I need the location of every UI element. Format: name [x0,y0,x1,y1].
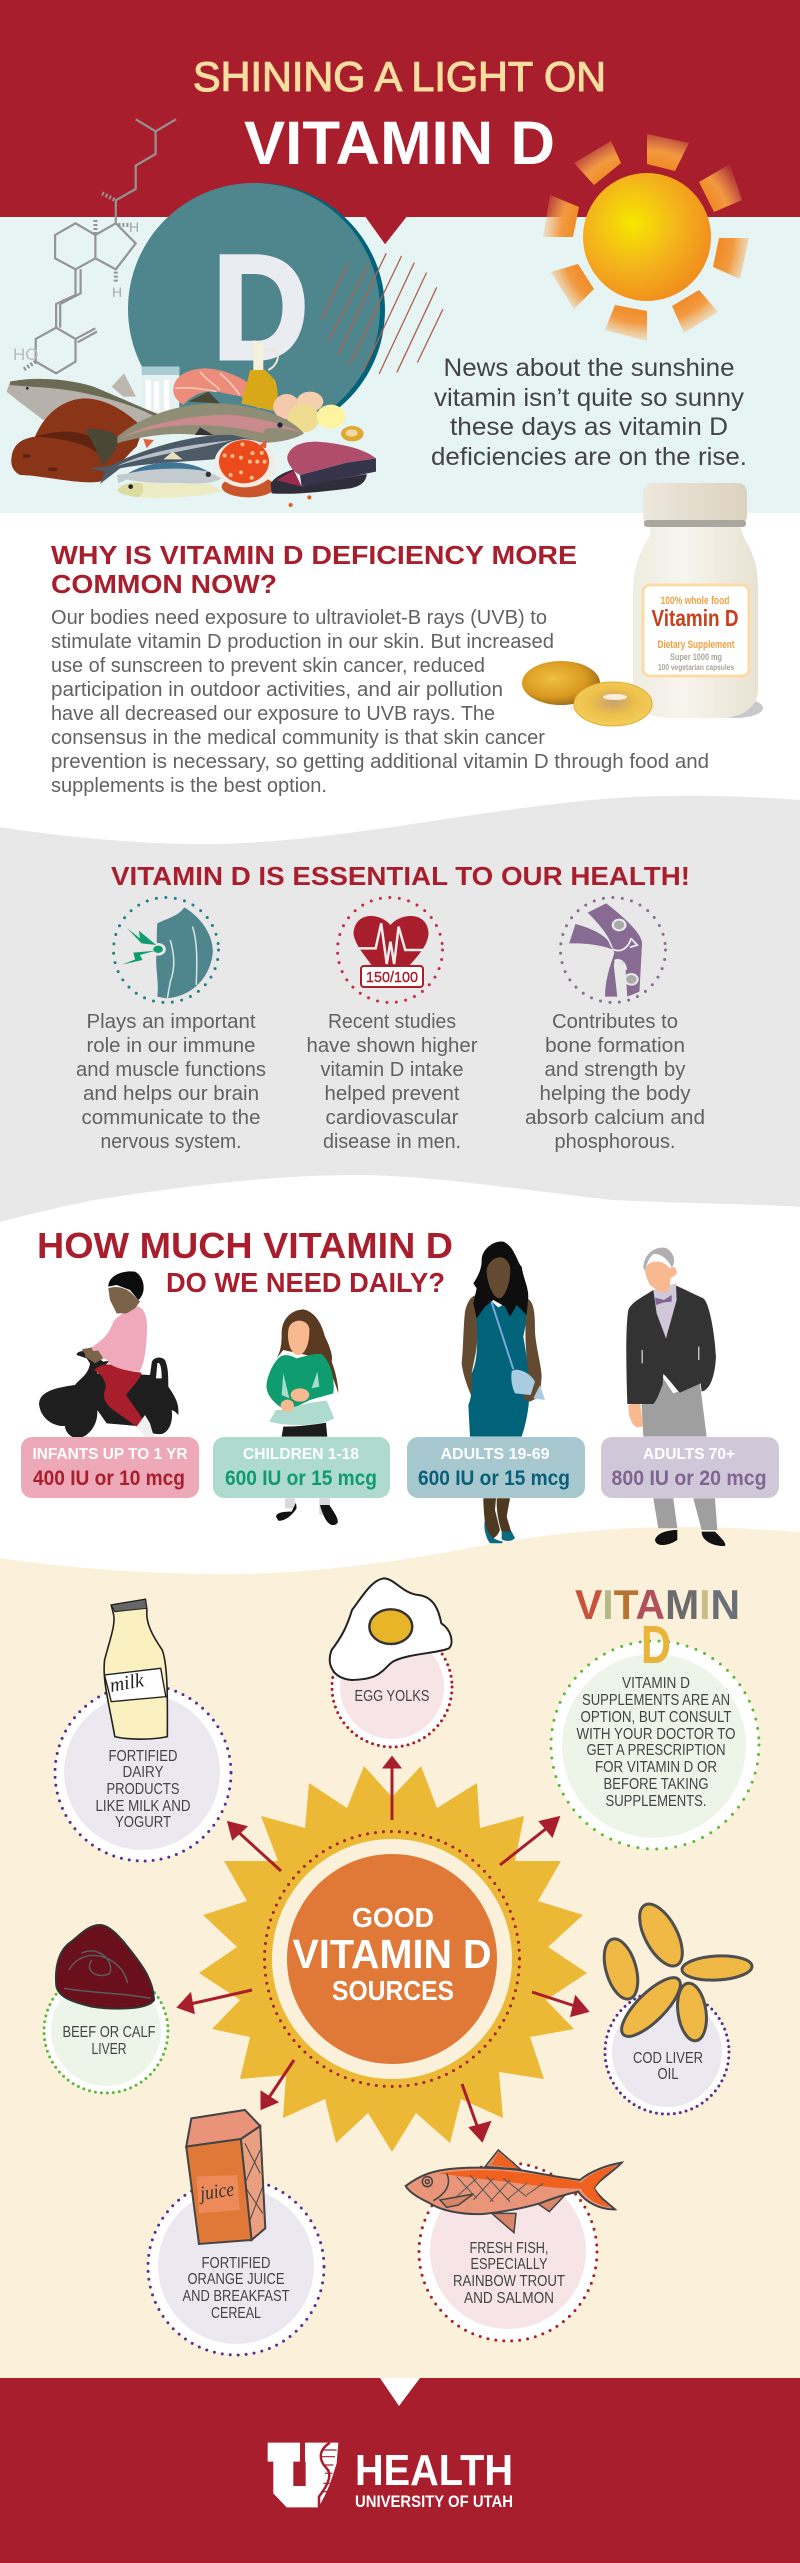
eggs [273,392,345,432]
softgel capsules [522,661,654,726]
card: adults 70+: 800 IU or 20 mcg [612,1467,766,1490]
chemical structure of vitamin D: H [112,284,122,300]
card: adults 70+: ADULTS 70+ [643,1446,735,1463]
salmon steak [173,368,267,408]
card: infants [21,1437,199,1498]
card: children [213,1437,390,1498]
rainbow trout [85,392,304,465]
capsule [341,426,364,441]
supplements text: SUPPLEMENTS. [606,1793,706,1810]
panel: essential to health [0,796,800,1222]
supplements text: SUPPLEMENTS ARE AN [582,1692,730,1709]
heading: how much [37,1225,453,1298]
icon: sun [543,134,749,341]
source: beef liver [44,1925,168,2093]
intro text [431,354,747,471]
logo: U with DNA [268,2443,338,2507]
sunburst label: GOOD [352,1902,434,1933]
icon: muscle and nerves [114,898,218,1002]
supplements text: GET A PRESCRIPTION [586,1742,726,1759]
supplements text: VITAMIN D [622,1675,690,1692]
dairy text: YOGURT [115,1814,171,1831]
supplements text: OPTION, BUT CONSULT [580,1709,732,1726]
icon: fried egg [330,1578,452,1680]
dairy text [96,1748,190,1831]
mackerel [90,427,260,484]
icon: oil capsules [598,1897,753,2044]
body paragraph: consensus in the medical community is that skin cancer [51,727,545,749]
figure: girl [266,1309,338,1525]
card: adults 19-69: ADULTS 19-69 [440,1446,550,1463]
icon: milk bottle: milk [108,1669,146,1697]
diagonal hatch lines [321,253,443,374]
sunburst label: SOURCES [332,1975,454,2006]
body paragraph: prevention is necessary, so getting additional vitamin D through food and [51,751,709,773]
text: bone formation: phosphorous. [554,1131,676,1153]
decorative VITAMIN lettering: VITAMIN [575,1581,740,1628]
intro text: deficiencies are on the rise. [431,443,747,471]
text: cardiovascular: Recent studies [328,1011,456,1033]
body paragraph: stimulate vitamin D production in our skin. But increased [51,631,554,653]
arrows from sun to sources [179,1758,587,2140]
oil bottle [242,340,278,412]
text: bone formation: bone formation [545,1035,685,1057]
supplements text: WITH YOUR DOCTOR TO [576,1726,736,1743]
dairy text: DAIRY [122,1764,164,1781]
dairy text: FORTIFIED [108,1748,178,1765]
card: adults 70+ [601,1437,779,1498]
card: children: CHILDREN 1-18 [243,1446,359,1463]
icon: juice carton [186,2110,265,2244]
title line two: VITAMIN D [244,109,555,177]
heading: how much: HOW MUCH VITAMIN D [37,1225,453,1266]
body paragraph [51,607,709,797]
intro text: these days as vitamin D [450,413,728,441]
text: immune and muscle [76,1011,266,1153]
text: cardiovascular: have shown higher [306,1035,478,1057]
source: dairy [55,1599,231,1861]
source: fresh fish [406,2150,622,2341]
text: cardiovascular: disease in men. [323,1131,461,1153]
text: immune and muscle: Plays an important [86,1011,256,1033]
beef text: BEEF OR CALF [62,2024,156,2041]
beef text: LIVER [92,2041,126,2058]
body paragraph: use of sunscreen to prevent skin cancer, reduced [51,655,485,677]
fish text [453,2240,565,2307]
header band [0,0,800,217]
juice text: AND BREAKFAST [182,2288,290,2305]
body paragraph: participation in outdoor activities, and air pollution [51,679,503,701]
supplement bottle [633,483,763,718]
fish text: RAINBOW TROUT [453,2273,565,2290]
food pile illustration [7,340,376,507]
text: cardiovascular: helped prevent [324,1083,460,1105]
icon: beef [56,1925,154,2009]
cod text [633,2050,703,2083]
bottle label [643,585,749,676]
header notch [365,217,407,245]
heading: how much: DO WE NEED DAILY? [166,1267,445,1298]
text: immune and muscle: role in our immune [86,1035,256,1057]
text: bone formation: Contributes to [552,1011,678,1033]
figure: woman [462,1241,545,1543]
card: infants: INFANTS UP TO 1 YR [32,1446,188,1463]
fish text: AND SALMON [464,2290,554,2307]
supplements text: FOR VITAMIN D OR [595,1759,717,1776]
vitamin D circle [128,183,385,437]
body paragraph: Our bodies need exposure to ultraviolet-B rays (UVB) to [51,607,547,629]
source: egg yolks [330,1578,452,1747]
text: bone formation: absorb calcium and [525,1107,705,1129]
text: cardiovascular: vitamin D intake [320,1059,464,1081]
text: immune and muscle: and helps our brain [83,1083,259,1105]
heading: why deficiency [51,540,577,599]
icon: juice carton: juice [196,2178,235,2205]
text: bone formation [525,1011,705,1153]
juice text: FORTIFIED [202,2255,270,2272]
intro text: News about the sunshine [444,354,734,382]
juice text [182,2255,290,2322]
big letter D: D [212,223,309,391]
chemical structure of vitamin D: HO [13,345,38,364]
bottle label: 100 vegetarian capsules [658,663,734,672]
text: cardiovascular [306,1011,478,1153]
title line one: SHINING A LIGHT ON [193,53,606,100]
cod text: COD LIVER [633,2050,703,2067]
body paragraph: supplements is the best option. [51,775,327,797]
roe drops [289,495,311,507]
text: bone formation: helping the body [540,1083,690,1105]
beef text [62,2024,156,2058]
logo subline: UNIVERSITY OF UTAH [355,2492,513,2511]
text: immune and muscle: nervous system. [100,1131,242,1153]
source: cod liver oil [598,1897,753,2114]
card: children: 600 IU or 15 mcg [225,1467,377,1490]
bottle label: Vitamin D [652,605,738,631]
decorative D lettering: D [641,1615,671,1675]
bottle label: Super 1000 mg [670,652,722,662]
hero background [0,217,800,513]
gray fish [7,373,160,428]
liver [11,398,143,482]
sunburst label [292,1902,492,2006]
cream sources background [0,1527,800,2378]
footer band [0,2378,800,2563]
juice text: ORANGE JUICE [188,2271,284,2288]
sardines [117,452,223,498]
bottle label: Dietary Supplement [658,639,735,651]
heading: why deficiency: COMMON NOW? [51,569,277,599]
heading: why deficiency: WHY IS VITAMIN D DEFICIENCY MORE [51,540,577,570]
cod text: OIL [658,2066,679,2083]
text: immune and muscle: and muscle functions [76,1059,266,1081]
icon: knee joint [560,898,666,1002]
fish text: FRESH FISH, [470,2240,548,2257]
source: supplements [551,1581,759,1849]
icon: fish [406,2150,622,2233]
bottle label: 100% whole food [660,595,730,607]
figure: infant on ride-on car [39,1271,178,1440]
icon: heart blood pressure: 150/100 [366,969,418,986]
glass of milk [142,367,179,413]
text: bone formation: and strength by [544,1059,686,1081]
dairy text: PRODUCTS [106,1781,180,1798]
card: infants: 400 IU or 10 mcg [33,1467,185,1490]
text: cardiovascular: cardiovascular [326,1107,459,1129]
supplements text [576,1675,736,1810]
figure: older man [626,1248,725,1546]
roe bowl [214,439,276,497]
icon: heart blood pressure [338,898,442,1002]
sunburst label: VITAMIN D [292,1931,492,1977]
intro text: vitamin isn’t quite so sunny [434,384,745,412]
icon: milk bottle [104,1599,167,1739]
body paragraph: have all decreased our exposure to UVB rays. The [51,703,495,725]
chemical structure of vitamin D [13,119,176,373]
dairy text: LIKE MILK AND [96,1798,190,1815]
egg text: EGG YOLKS [354,1688,430,1705]
panel heading: VITAMIN D IS ESSENTIAL TO OUR HEALTH! [111,861,690,891]
central sunburst [199,1766,587,2152]
card: adults 19-69 [407,1437,585,1498]
text: immune and muscle: communicate to the [82,1107,260,1129]
fish text: ESPECIALLY [470,2256,548,2273]
card: adults 19-69: 600 IU or 15 mcg [418,1467,570,1490]
tuna steak [271,442,376,494]
juice text: CEREAL [211,2305,261,2322]
source: orange juice [148,2110,324,2355]
chemical structure of vitamin D: H [129,219,139,235]
logo wordmark: HEALTH [355,2446,513,2495]
supplements text: BEFORE TAKING [604,1776,708,1793]
